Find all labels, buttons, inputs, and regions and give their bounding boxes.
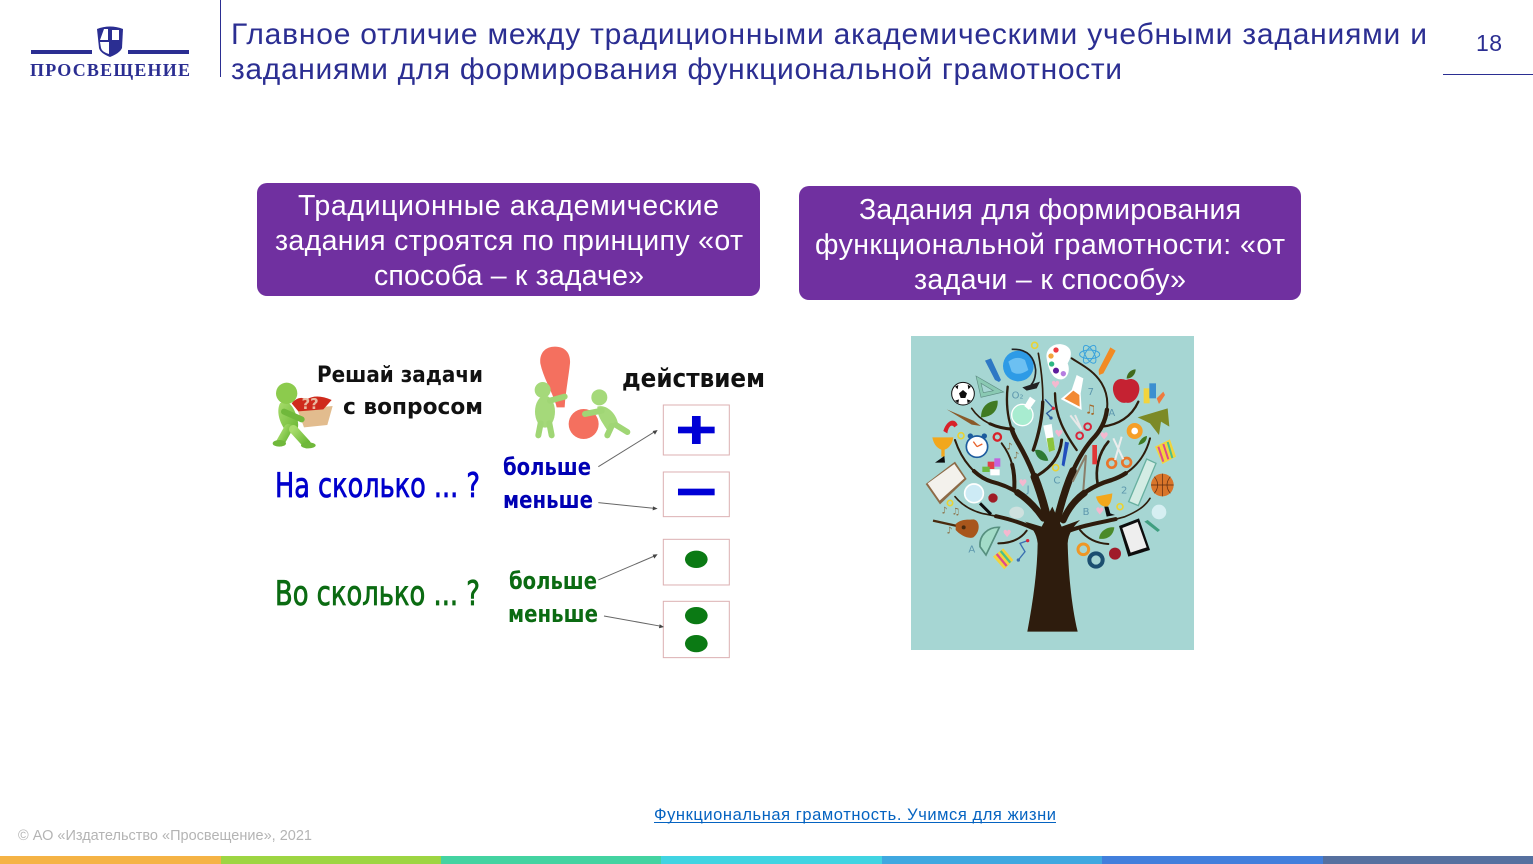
copyright: © АО «Издательство «Просвещение», 2021 <box>18 828 312 844</box>
icon: hearts: ♥ <box>1018 478 1027 489</box>
icon: small letters: A <box>1108 408 1115 419</box>
label: less blue: меньше <box>503 486 593 514</box>
panel: functional literacy heading: Задания для формирования <box>859 194 1241 226</box>
text: solve problems <box>317 363 483 420</box>
icon: small crayon <box>1144 520 1160 532</box>
icon: yellow rings <box>947 342 1123 510</box>
text: solve problems: Решай задачи <box>317 363 483 388</box>
icon: globe <box>1003 349 1040 391</box>
icon: small letters: A <box>968 545 975 556</box>
icon: small letters: 2 <box>1121 485 1127 496</box>
icon: red gear <box>994 433 1001 441</box>
icon: trophy <box>932 437 953 463</box>
label: less green: меньше <box>508 600 598 628</box>
logo: Prosveshchenie: ПРОСВЕЩЕНИЕ <box>30 60 190 80</box>
icon: test tube <box>1043 424 1055 452</box>
icon: small notes <box>942 441 1019 536</box>
icon: protractor <box>980 527 999 555</box>
icon: orange scissors <box>1107 437 1131 468</box>
icon: orange gear <box>1078 544 1089 555</box>
arrow: less to two dots <box>604 616 664 628</box>
icon: hearts: ♥ <box>1003 529 1012 540</box>
box: one dot <box>663 539 729 585</box>
icon: hearts <box>1003 380 1109 540</box>
icon: scissors <box>1070 415 1091 439</box>
label: more green: больше <box>509 567 597 595</box>
icon: computer mouse <box>1009 507 1024 519</box>
icon: open book <box>926 462 967 504</box>
icon: magnifier <box>965 484 991 514</box>
icon: ladybug <box>988 493 998 503</box>
icon: small letters <box>968 387 1127 556</box>
icon: hearts: ♥ <box>1051 380 1060 391</box>
icon: hearts: ♥ <box>1095 506 1104 517</box>
icon: small letters: 7 <box>1088 387 1094 398</box>
panel: functional literacy heading <box>799 186 1301 300</box>
icon: blue gear <box>1089 553 1103 567</box>
box: plus <box>663 405 729 455</box>
arrow: more to plus <box>598 430 658 467</box>
text: how many times: Во сколько ... ? <box>275 574 480 614</box>
icon: small letters: C <box>1053 475 1060 486</box>
illustration: solve by action <box>535 347 729 658</box>
icon: figure carrying a box: ?? <box>302 396 319 413</box>
illustration: solve problems with a question <box>273 363 483 506</box>
page number: 18 <box>1476 30 1502 56</box>
panel: functional literacy heading: задачи – к способу» <box>914 264 1186 296</box>
tree icons <box>926 342 1176 569</box>
icon: small letters: O₂ <box>1012 390 1024 401</box>
arrow: less to minus <box>598 503 658 510</box>
title <box>231 18 1427 86</box>
title: заданиями для формирования функциональной грамотности <box>231 53 1122 86</box>
icon: tablet <box>1119 518 1150 557</box>
icon: basketball <box>1151 474 1174 496</box>
icon: apple <box>1113 369 1139 403</box>
box: minus <box>663 472 729 517</box>
icon: flask green <box>1012 397 1036 426</box>
icon: figure carrying a box <box>273 383 333 448</box>
icon: guitar <box>933 519 979 538</box>
icon: blue pencil <box>985 358 1001 382</box>
icon: music notes: ♫ <box>1085 401 1096 416</box>
icon: crayons <box>1155 439 1176 464</box>
panel: traditional tasks heading <box>257 183 760 296</box>
label: by action: действием <box>622 364 765 394</box>
title: Главное отличие между традиционными академическими учебными заданиями и <box>231 18 1427 51</box>
icon: small notes: ♪ <box>1013 451 1019 462</box>
footer colour bar <box>0 856 1533 864</box>
icon: paint tubes <box>1144 383 1165 404</box>
icon: orange flask <box>1061 375 1083 410</box>
icon: small leaf <box>1099 527 1114 539</box>
icon: small notes: ♪ <box>942 505 948 516</box>
panel: traditional tasks heading: способа – к задаче» <box>374 260 644 292</box>
icon: hearts: ♥ <box>1054 429 1063 440</box>
icon: small notes: ♫ <box>952 506 960 517</box>
icon: soccer ball <box>952 382 974 405</box>
icon: paint brush <box>947 409 981 426</box>
icon: exclamation mark with figures <box>535 347 627 439</box>
tree trunk and branches <box>955 353 1150 632</box>
icon: paper plane <box>1138 408 1169 435</box>
icon: small letters: B <box>1083 507 1090 518</box>
icon: small letters: J <box>1026 485 1030 496</box>
icon: pencil <box>1099 347 1116 375</box>
icon: leaf center <box>1035 450 1048 461</box>
icon: colored blocks <box>982 458 1000 475</box>
link: functional literacy: Функциональная грамотность. Учимся для жизни <box>654 806 1056 824</box>
icon: red pen <box>1092 445 1097 464</box>
illustration: tree of knowledge <box>911 336 1194 650</box>
icon: compass <box>1073 455 1086 490</box>
icon: blue pen <box>1062 442 1069 467</box>
logo: Prosveshchenie <box>30 26 190 80</box>
arrow: more to one dot <box>598 554 658 580</box>
icon: atom <box>1080 344 1100 365</box>
panel: traditional tasks heading: задания строятся по принципу «от <box>275 225 743 257</box>
icon: molecule center <box>1045 399 1055 420</box>
icon: flower <box>1127 423 1147 445</box>
icon: colored cube <box>993 548 1013 569</box>
icon: small notes: ♪ <box>947 525 953 536</box>
box: two dots <box>663 601 729 658</box>
text: how much more: На сколько ... ? <box>275 466 480 506</box>
text: solve problems: с вопросом <box>343 395 483 420</box>
icon: hearts: ♥ <box>1100 432 1109 443</box>
icon: magnet <box>943 421 958 433</box>
icon: ladybug right <box>1109 548 1121 560</box>
icon: lightbulb <box>1152 505 1166 519</box>
icon: ruler <box>1129 459 1156 506</box>
icon: alarm clock <box>966 433 988 457</box>
panel: functional literacy heading: функциональной грамотности: «от <box>815 229 1285 261</box>
icon: trophy small <box>1096 493 1115 517</box>
icon: set square <box>976 376 1004 397</box>
icon: palette <box>1046 344 1071 379</box>
icon: shield <box>97 26 123 57</box>
label: more blue: больше <box>503 453 591 481</box>
icon: molecule <box>1017 539 1029 562</box>
panel: traditional tasks heading: Традиционные академические <box>298 190 719 222</box>
icon: green leaf <box>981 401 998 417</box>
icon: small notes: ♪ <box>1007 441 1013 452</box>
